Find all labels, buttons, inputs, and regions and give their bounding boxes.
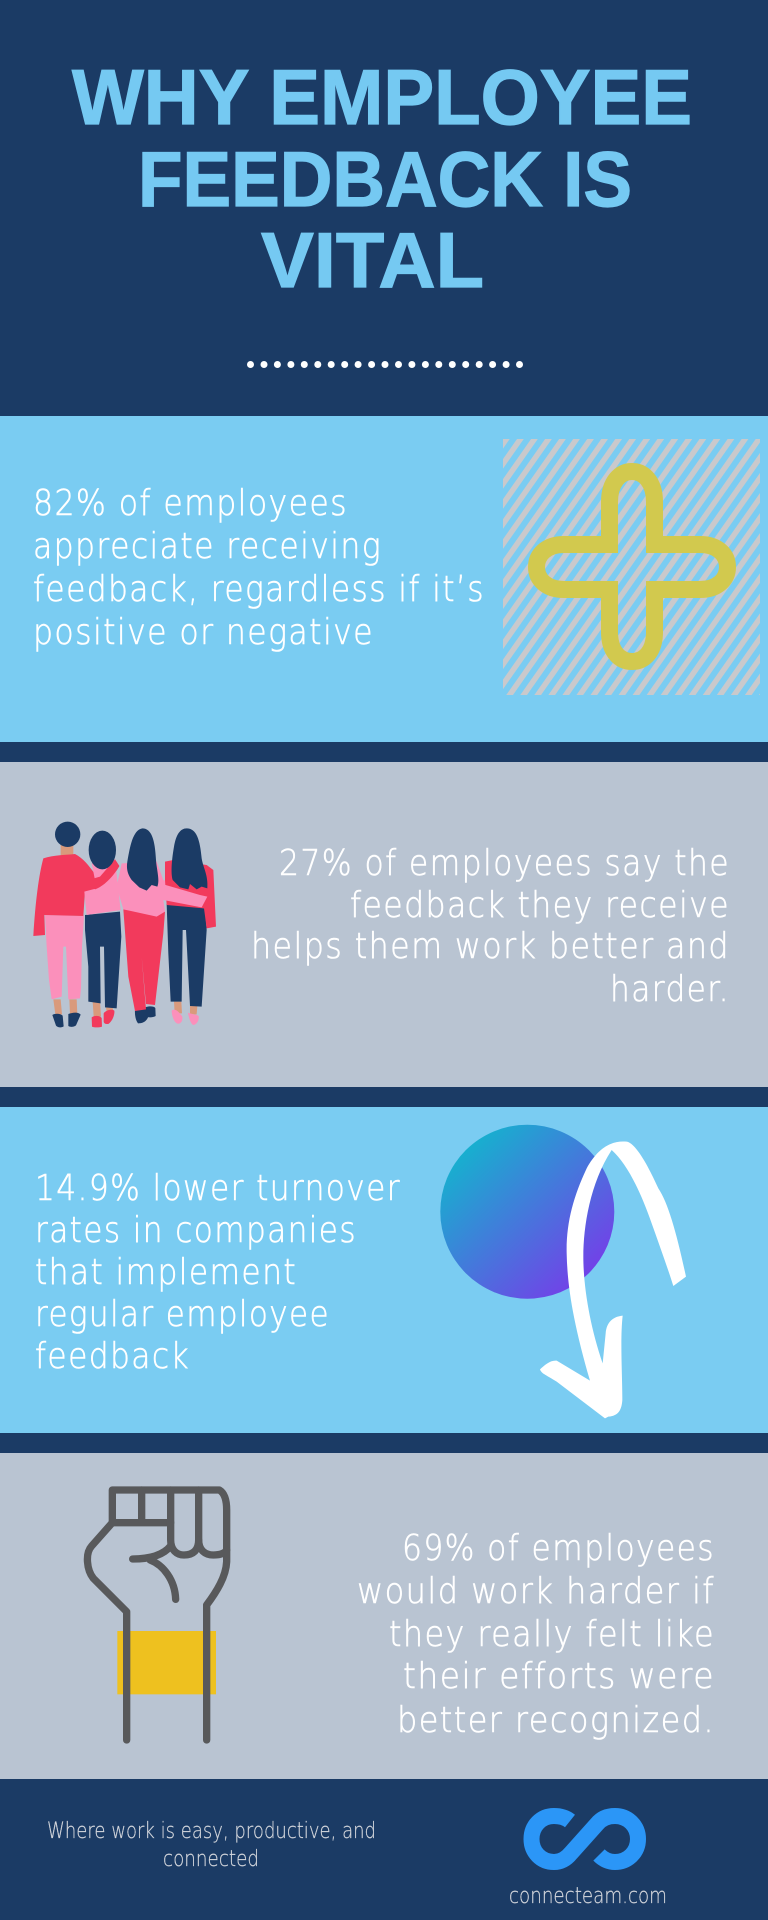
footer url: connecteam.com [509,1884,667,1909]
text: 14.9% statistic: regular employee [35,1294,330,1335]
text: 14.9% statistic: feedback [35,1336,190,1377]
text: 82% statistic: 82% of employees [33,483,348,524]
footer tagline: Where work is easy, productive, and [47,1819,376,1844]
text: 69% statistic: better recognized. [397,1700,715,1741]
text: 69% statistic: their efforts were [403,1656,715,1697]
title: FEEDBACK IS [138,135,632,223]
text: 14.9% statistic: 14.9% lower turnover [35,1168,401,1209]
text: 14.9% statistic: that implement [35,1252,297,1293]
icon: hand-drawn looping arrow [540,1141,686,1418]
icon: gradient circle [440,1125,614,1299]
title: VITAL [261,216,484,304]
text: 14.9% statistic [35,1168,401,1377]
dotted divider [247,361,523,368]
text: 82% statistic [33,483,485,653]
text: 82% statistic: feedback, regardless if it’s [33,569,485,610]
person two [84,831,121,1027]
text: 69% statistic [357,1528,715,1741]
text: 27% statistic: harder. [610,969,730,1010]
icon: raised fist with yellow band [87,1490,227,1740]
panel: 69% would work harder [0,1453,768,1779]
footer tagline [47,1819,376,1872]
text: 14.9% statistic: rates in companies [35,1210,357,1251]
footer tagline: connected [163,1847,259,1872]
text: 69% statistic: would work harder if [357,1571,715,1612]
title [72,53,692,304]
text: 82% statistic: positive or negative [33,612,374,653]
illustration: four friends seen from behind [33,822,216,1027]
text: 69% statistic: 69% of employees [402,1528,715,1569]
text: 69% statistic: they really felt like [389,1614,715,1655]
text: 27% statistic [251,843,730,1010]
logo: connecteam infinity mark [532,1816,638,1862]
text: 82% statistic: appreciate receiving [33,526,382,567]
title: WHY EMPLOYEE [72,53,692,141]
panel: 82% appreciate feedback [0,416,768,742]
icon: hatched square with plus [503,439,760,695]
person one [33,822,119,1027]
person three [117,828,207,1023]
panel: 14.9% lower turnover [0,1107,768,1433]
person four [160,828,216,1025]
panel: 27% work better [0,762,768,1087]
